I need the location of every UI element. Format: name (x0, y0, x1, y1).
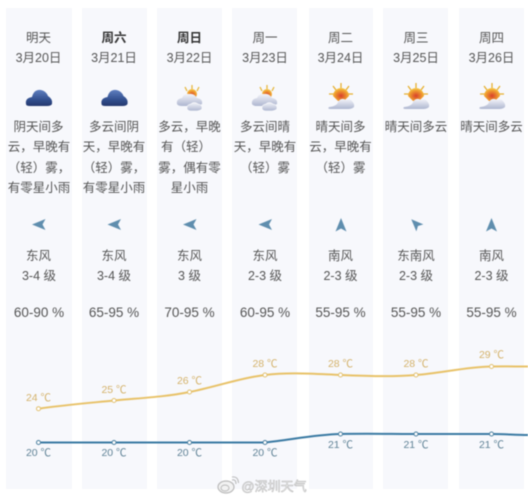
weather description 3月20日: 阴天间多 (13, 120, 64, 134)
chart: high temperature line: 28 ℃ (252, 358, 278, 370)
icon: overcast cloud 3月20日 (26, 90, 52, 106)
icon: sun and cloud 3月24日 (328, 83, 354, 109)
weather description 3月22日: 雾，偶有零 (158, 161, 221, 175)
icon: wind arrow east (258, 219, 272, 230)
icon: sun and cloud 3月25日 (403, 83, 429, 109)
wind force labels: 2-3 级 (474, 269, 509, 283)
weather description 3月20日 (8, 120, 70, 195)
dates: 3月26日 (469, 51, 514, 65)
humidity labels: 55-95 % (391, 305, 441, 320)
chart: low temperature line: 20 ℃ (177, 447, 203, 459)
chart: low temperature line: 20 ℃ (252, 447, 278, 459)
panel: 3月23日 column (232, 8, 297, 489)
wind direction labels: 东风 (26, 249, 51, 263)
humidity labels: 65-95 % (89, 305, 139, 320)
panel: 3月24日 column (309, 8, 373, 489)
chart: low temperature line (26, 432, 528, 459)
panel: 3月26日 column (459, 8, 524, 489)
icon: cloud and sun 3月23日 (252, 85, 277, 111)
weather description 3月24日: （轻）雾 (315, 161, 366, 175)
day headings: 周二 (328, 31, 353, 45)
icon: sun and cloud 3月26日 (479, 83, 505, 109)
chart: high temperature line: 28 ℃ (328, 358, 354, 370)
weather description 3月23日: 多云间晴 (240, 120, 290, 134)
humidity labels: 55-95 % (315, 305, 366, 320)
wind direction labels: 东风 (252, 249, 278, 263)
wind force labels: 3-4 级 (22, 269, 57, 283)
weather description 3月23日 (234, 120, 296, 175)
day headings: 周六 (101, 30, 127, 45)
wind direction labels: 东风 (101, 249, 127, 263)
weather description 3月24日: 晴天间多 (315, 120, 366, 134)
dates: 3月23日 (242, 51, 288, 65)
weather description 3月21日: 有零星小雨 (83, 181, 145, 195)
humidity labels: 70-95 % (164, 305, 215, 320)
chart: high temperature line: 26 ℃ (177, 375, 203, 387)
wind direction labels: 东风 (177, 249, 202, 263)
wind force labels: 3 级 (178, 269, 201, 283)
wind direction labels: 南风 (328, 248, 353, 263)
icon: overcast cloud 3月21日 (101, 90, 128, 106)
weather description 3月20日: （轻）雾， (8, 161, 70, 175)
dates: 3月25日 (393, 51, 439, 65)
wind direction labels: 南风 (479, 248, 504, 263)
icon: wind arrow south (336, 218, 346, 232)
icon: cloud and sun 3月22日 (177, 85, 202, 111)
chart: high temperature line: 29 ℃ (479, 349, 505, 361)
humidity labels (14, 305, 517, 320)
weather description 3月23日: 天，早晚有 (234, 140, 296, 154)
weather description 3月21日: 多云间阴 (89, 120, 139, 134)
chart: high temperature line: 24 ℃ (26, 392, 52, 404)
humidity labels: 60-95 % (240, 305, 290, 320)
chart: low temperature line: 21 ℃ (403, 439, 429, 451)
weather description 3月24日: 云，早晚有 (309, 140, 372, 154)
dates: 3月21日 (91, 51, 137, 65)
icon: wind arrow southeast (408, 216, 423, 231)
panel: 3月21日 column (82, 8, 147, 489)
wind force labels: 2-3 级 (248, 269, 283, 283)
weather description 3月22日: 星小雨 (171, 181, 208, 195)
dates: 3月24日 (318, 51, 363, 65)
dates (16, 51, 514, 65)
dates: 3月20日 (16, 51, 61, 65)
wind force labels: 3-4 级 (97, 269, 132, 283)
icon: wind arrow east (183, 219, 196, 230)
weather description 3月22日: 有（轻） (161, 140, 211, 154)
day headings: 周四 (479, 31, 504, 45)
weather description 3月24日 (309, 120, 372, 175)
weather description 3月21日 (83, 120, 145, 195)
icon: wind arrow south (486, 218, 497, 232)
dates: 3月22日 (167, 51, 212, 65)
chart: high temperature line: 25 ℃ (101, 384, 127, 396)
wind force labels: 2-3 级 (399, 269, 434, 283)
weather description 3月22日 (158, 120, 221, 195)
watermark: weibo logo and account name (218, 477, 307, 494)
day headings (26, 30, 504, 45)
chart: high temperature line (26, 349, 528, 411)
humidity labels: 60-90 % (14, 305, 64, 320)
wind force labels (22, 269, 509, 283)
wind force labels: 2-3 级 (323, 269, 358, 283)
weather description 3月23日: （轻）雾 (240, 161, 290, 175)
wind direction labels (26, 248, 504, 263)
day headings: 周一 (252, 31, 278, 45)
weather description 3月22日: 多云，早晚 (158, 120, 221, 134)
chart: high temperature line: 28 ℃ (403, 358, 429, 370)
panel: 3月20日 column (6, 8, 72, 489)
weather description 3月20日: 云，早晚有 (8, 140, 70, 154)
watermark: weibo logo and account name: @深圳天气 (241, 479, 307, 494)
weather description 3月26日: 晴天间多云 (460, 120, 523, 134)
panel: 3月25日 column (383, 8, 448, 489)
humidity labels: 55-95 % (466, 305, 517, 320)
weather description 3月25日: 晴天间多云 (385, 120, 447, 134)
panel: 3月22日 column (157, 8, 222, 489)
chart: low temperature line: 21 ℃ (479, 439, 505, 451)
day headings: 明天 (26, 31, 51, 45)
day headings: 周日 (177, 31, 202, 45)
icon: wind arrow east (32, 219, 46, 230)
chart: low temperature line: 20 ℃ (101, 447, 127, 459)
chart: low temperature line: 21 ℃ (328, 439, 354, 451)
weather description 3月21日: 天，早晚有 (83, 140, 145, 154)
chart: low temperature line: 20 ℃ (26, 447, 52, 459)
weather description 3月21日: （轻）雾， (83, 161, 145, 175)
weather description 3月20日: 有零星小雨 (8, 181, 70, 195)
icon: wind arrow east (108, 219, 121, 230)
wind direction labels: 东南风 (397, 248, 435, 263)
day headings: 周三 (403, 31, 429, 45)
